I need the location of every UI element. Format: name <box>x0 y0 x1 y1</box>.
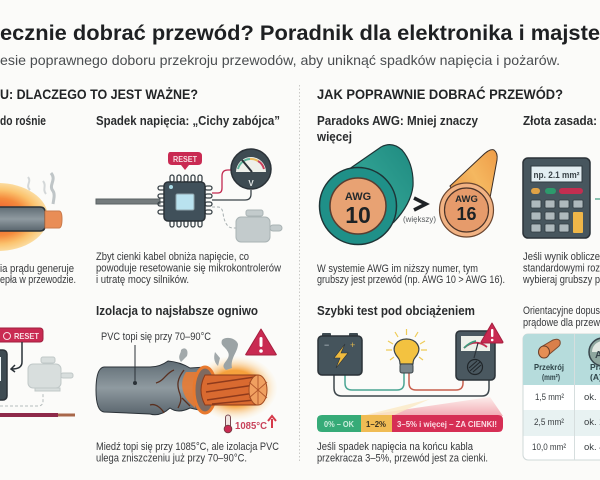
text: AWG: grubszy jest przewód (np. AWG 10 > AWG 16). <box>317 274 505 286</box>
text: voltage drop: Zbyt cienki kabel obniża napięcie, co <box>96 251 249 263</box>
text: voltage drop <box>96 251 281 286</box>
icon: multimeter <box>456 331 495 380</box>
bar: voltage drop scale: 3–5% i więcej – ZA CIENKI! <box>397 419 497 429</box>
icon: voltmeter: V <box>248 179 254 188</box>
text: table intro <box>523 305 600 329</box>
text: AWG <box>317 263 505 286</box>
heading: AWG: więcej <box>316 130 352 144</box>
text: insulation: ulega zniszczeniu już przy 70–90°C. <box>96 452 247 464</box>
icon: warning triangle <box>481 323 503 343</box>
icon: copper wire <box>538 339 560 358</box>
heading: load test: Szybki test pod obciążeniem <box>317 303 475 318</box>
icon: battery <box>318 333 362 375</box>
symbol: greater than <box>414 198 426 210</box>
icon: calculator <box>523 158 590 238</box>
title: ecznie dobrać przewód? Poradnik dla elektronika i majste <box>0 21 600 45</box>
heading: heat: do rośnie <box>0 114 46 128</box>
table header <box>534 362 600 382</box>
icon: motor <box>28 357 73 391</box>
label: reset tag: RESET <box>173 155 197 164</box>
text: voltage drop: i utratę mocy silników. <box>96 274 189 286</box>
text: golden rule <box>522 251 600 286</box>
heading: insulation: Izolacja to najsłabsze ogniwo <box>96 303 258 318</box>
illustration: thick AWG 10: 10 <box>345 202 371 228</box>
illustration: thin AWG 16 <box>440 150 497 237</box>
panel: device reset <box>0 328 75 417</box>
panel: golden rule <box>522 114 600 286</box>
text: heat <box>0 263 76 286</box>
icon: motor <box>236 210 282 242</box>
section heading: left: U: DLACZEGO TO JEST WAŻNE? <box>0 87 198 102</box>
table header: Przekrój <box>534 362 564 372</box>
arrow <box>595 198 600 200</box>
illustration: melting cable <box>96 329 277 433</box>
text: insulation: Miedź topi się przy 1085°C, ale izolacja PVC <box>96 441 279 453</box>
panel: AWG paradox <box>316 114 505 286</box>
icon: voltmeter <box>231 149 271 189</box>
panel: heat <box>0 114 76 286</box>
bar: voltage drop scale: 0% – OK <box>324 419 355 429</box>
table rows: 10,0 mm² <box>532 442 566 453</box>
panel: current table <box>523 305 600 460</box>
illustration: thin AWG 16: 16 <box>456 204 477 224</box>
icon: up arrow <box>268 416 276 428</box>
label: pvc melting: PVC topi się przy 70–90°C <box>101 331 211 343</box>
label: larger: (większy) <box>403 215 436 224</box>
heading: voltage drop: Spadek napięcia: „Cichy zabójca” <box>96 114 280 128</box>
icon: thermometer <box>224 415 232 433</box>
illustration: thick AWG 10 <box>320 145 413 244</box>
table rows: 2,5 mm² <box>534 417 564 428</box>
illustration: overheating cable <box>0 173 62 251</box>
illustration: thick AWG 10: AWG <box>345 191 371 203</box>
label: reset tag <box>168 152 202 170</box>
table <box>523 334 600 460</box>
bar: voltage drop scale: 1–2% <box>366 419 386 429</box>
illustration: chip and meter <box>96 149 282 242</box>
heading: AWG <box>316 114 478 144</box>
icon: battery: + <box>350 340 355 350</box>
text: load test: Jeśli spadek napięcia na końcu kabla <box>317 441 474 453</box>
subtitle: esie poprawnego doboru przekroju przewodów, aby uniknąć spadków napięcia i pożarów. <box>0 52 560 68</box>
text: load test <box>317 441 488 464</box>
divider <box>298 85 300 462</box>
table header: (mm²) <box>542 372 560 382</box>
icon: calculator: np. 2.1 mm² <box>534 170 580 180</box>
text: load test: przekracza 3–5%, przewód jest za cienki. <box>317 452 488 464</box>
label: reset button: RESET <box>14 331 40 341</box>
text: heat: epła w przewodzie. <box>0 274 76 286</box>
icon: battery: − <box>324 340 329 350</box>
section heading: right: JAK POPRAWNIE DOBRAĆ PRZEWÓD? <box>317 87 563 102</box>
illustration: thin AWG 16: AWG <box>455 194 478 205</box>
table rows <box>532 392 600 453</box>
panel: voltage drop <box>96 114 282 286</box>
table rows: 1,5 mm² <box>535 392 564 403</box>
icon: warning triangle <box>246 329 276 355</box>
panel: load test <box>317 303 503 464</box>
panel: insulation <box>96 303 279 464</box>
bar: voltage drop scale <box>317 415 503 432</box>
text: voltage drop: powoduje resetowanie się mikrokontrolerów <box>96 262 281 274</box>
label: copper temperature: 1085°C <box>235 421 267 432</box>
illustration: test circuit <box>318 323 503 416</box>
icon: light bulb <box>386 329 427 373</box>
heading: golden rule: Złota zasada: <box>523 114 597 128</box>
text: insulation <box>96 441 279 464</box>
text: AWG: W systemie AWG im niższy numer, tym <box>317 263 478 275</box>
text: heat: ia prądu generuje <box>0 263 74 275</box>
heading: AWG: Paradoks AWG: Mniej znaczy <box>317 114 478 128</box>
